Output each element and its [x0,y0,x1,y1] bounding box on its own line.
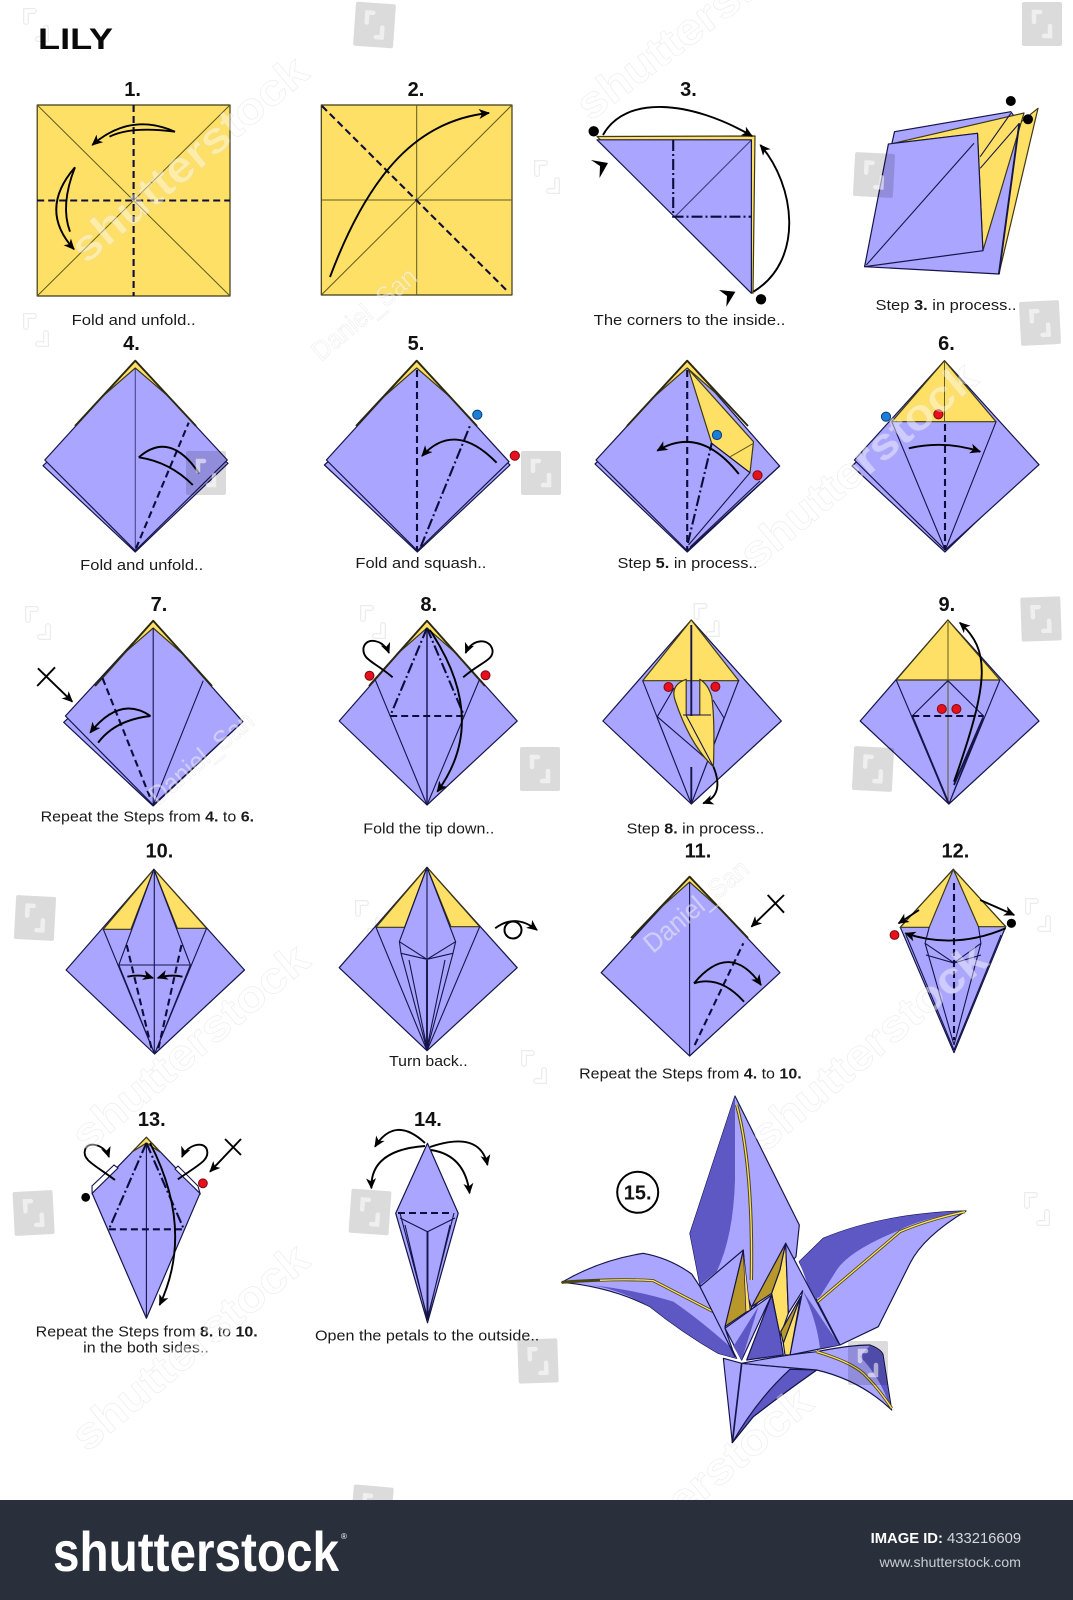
caption: Open the petals to the outside.. [315,1328,539,1345]
diagram: narrow kite with opening arrows [371,1130,488,1323]
step number 2: 2. [408,79,424,101]
diagram: turn back [339,867,537,1051]
diagram: blue diamond [43,361,228,552]
diagram: folded triangle [588,107,789,307]
panel: step 15 finished lily [562,1096,966,1443]
footer logo: shutterstock [53,1520,340,1583]
watermark text: shutterstock [61,46,318,273]
step number 4: 4. [123,333,140,355]
diagram: yellow triangle top [852,361,1039,552]
diagram: squash fold [324,361,519,552]
panel: step 11 [579,840,802,1082]
caption: Fold and squash.. [355,555,486,572]
panel: step 5 in process [595,361,780,572]
faint watermark logo outlines [26,11,1048,1223]
diagram: fold tip down [339,621,517,805]
watermark text: shutterstock [730,352,987,579]
caption: Fold the tip down.. [363,820,494,837]
caption: Fold and unfold.. [72,312,196,329]
panel: step 4 [43,333,228,574]
watermark text: shutterstock [62,1234,319,1461]
step number 1: 1. [124,79,141,101]
caption: Repeat the Steps from 4. to 10. [579,1065,802,1082]
panel: step 3 [588,79,789,329]
caption: The corners to the inside.. [594,312,785,329]
watermark text: shutterstock [62,934,319,1161]
step number 11: 11. [685,840,711,862]
panel: step 6 [852,333,1039,552]
title: LILY [38,23,113,56]
diagram: narrow folds [66,869,244,1054]
step number 12: 12. [941,840,969,862]
watermark text: Daniel_San [143,705,260,811]
panel: step 2 [321,79,512,295]
illustration: origami lily flower [562,1096,966,1443]
step number 5: 5. [408,333,424,355]
icon: turn over arrow [495,921,537,938]
step number 3: 3. [680,79,697,101]
panel: step 9 [860,594,1039,804]
caption: Repeat the Steps from 4. to 6. [41,809,254,826]
diagram: repeat on right [601,877,784,1056]
diagram: yellow square diagonal fold [321,105,512,295]
watermark text: Daniel_San [306,261,423,367]
caption: Step 8. in process.. [627,820,764,837]
panel: step 8 in process [603,620,781,837]
caption: Repeat the Steps from 8. to 10. [36,1324,258,1341]
panel: step 14 [315,1109,539,1345]
image id: IMAGE ID: 433216609 [871,1530,1021,1547]
caption: Fold and unfold.. [80,557,203,574]
panel: step 5 [324,333,519,572]
registered mark: ® [341,1532,347,1541]
diagram: tip folding down [603,620,781,804]
step number 13: 13. [138,1109,166,1131]
watermark text: Daniel_San [638,853,755,959]
watermark text: shutterstock [565,1377,822,1600]
step number 8: 8. [420,594,437,616]
step number 15 in circle: 15. [624,1182,652,1204]
diagram: kite with tip fold [81,1137,241,1318]
panel: turn back step [339,867,537,1070]
panel: step 1 [37,79,230,329]
panel: step 7 [37,594,254,826]
diagram: repeat on left [37,621,243,806]
panel: step 12 [890,840,1016,1053]
step number 6: 6. [938,333,955,355]
panel: step 8 [339,594,517,837]
step number 14: 14. [414,1109,442,1131]
footer bar [0,1500,1073,1600]
diagram: kite fold [890,869,1016,1053]
step number 15 in circle [617,1172,658,1213]
caption second line: in the both sides.. [83,1340,209,1357]
panel: step 3 in process [865,96,1038,314]
step number 9: 9. [939,594,955,616]
caption: Turn back.. [389,1053,468,1070]
watermark text: shutterstock [740,934,997,1161]
diagram: in-process fold [865,96,1038,274]
caption: Step 5. in process.. [618,555,758,572]
step number 7: 7. [151,594,167,616]
caption: Step 3. in process.. [876,297,1016,314]
diagram: squash in process [595,361,780,552]
site url: www.shutterstock.com [878,1554,1021,1570]
step number 10: 10. [145,840,173,862]
panel: step 13 [36,1109,258,1357]
diagram: fold inner triangle [860,620,1039,804]
diagram: yellow square with folds [37,105,230,296]
panel: step 10 [66,840,244,1054]
